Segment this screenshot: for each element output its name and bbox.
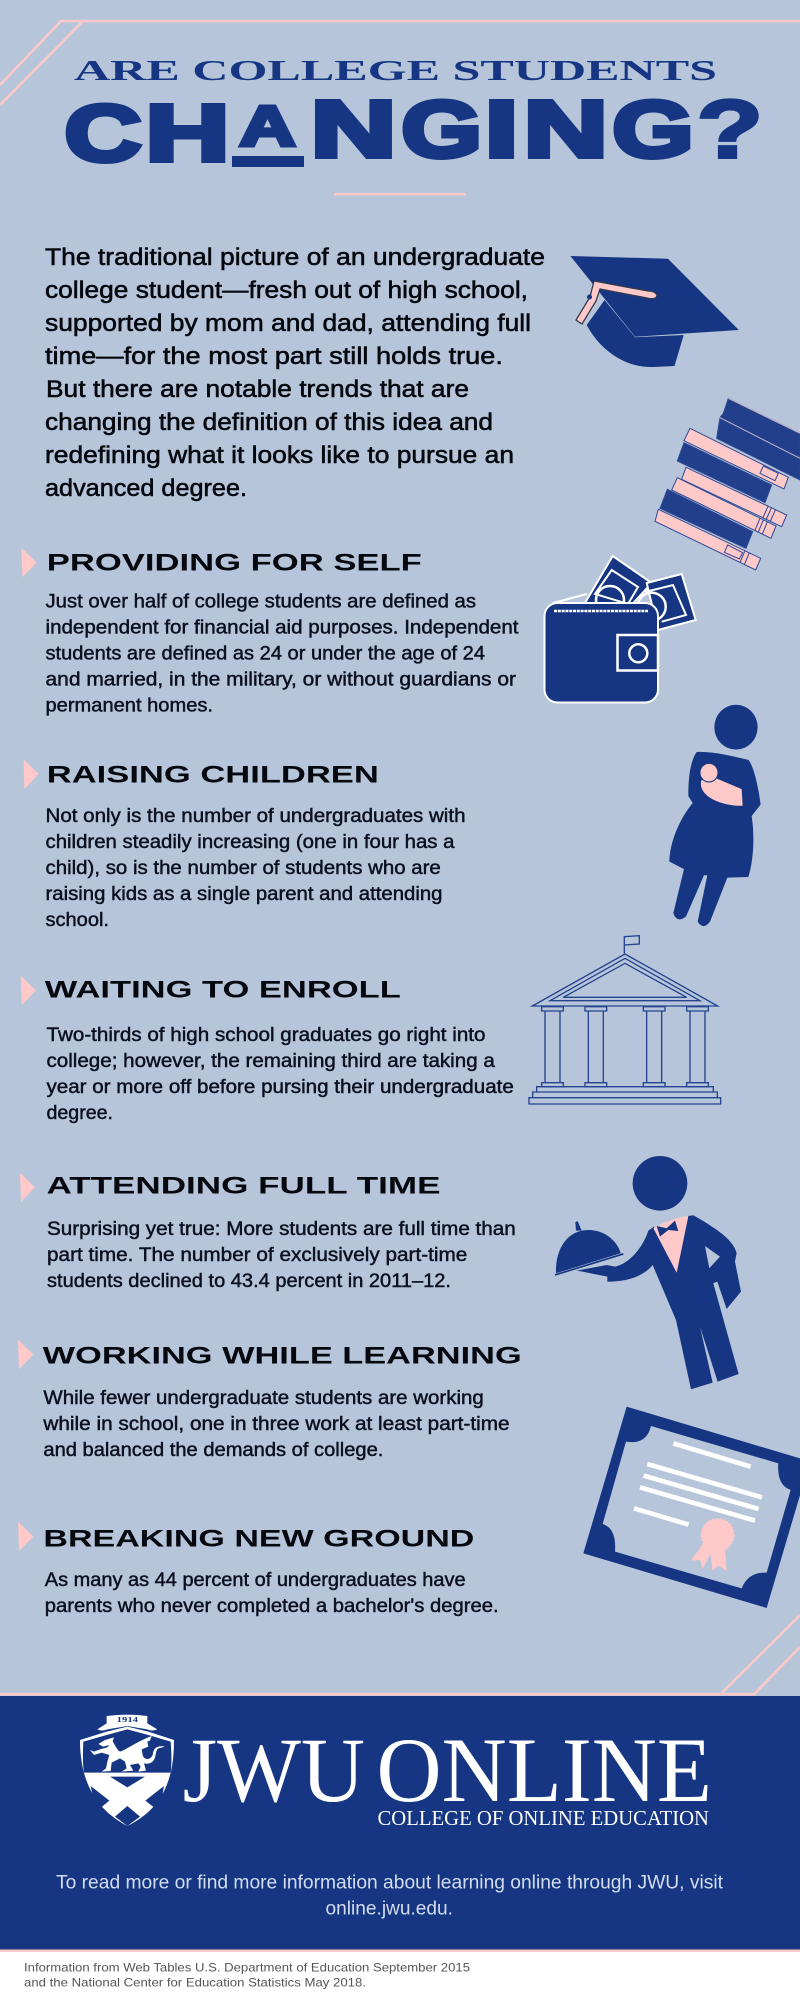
- body text: raising kids as a single parent and attending: [46, 884, 442, 905]
- heading: RAISING CHILDREN: [47, 762, 379, 789]
- title line: changing: H: [146, 88, 230, 178]
- call to action text: [56, 1872, 724, 1919]
- heading: ATTENDING FULL TIME: [46, 1172, 440, 1199]
- icon: stack of books: [655, 398, 800, 570]
- body text: [46, 806, 466, 931]
- body text: Two-thirds of high school graduates go right into: [46, 1025, 486, 1046]
- body text: students declined to 43.4 percent in 2011–12.: [47, 1271, 451, 1292]
- title line: changing: N: [311, 84, 396, 174]
- intro paragraph: But there are notable trends that are: [46, 376, 469, 403]
- title line: are college students: ARE COLLEGE STUDENTS: [74, 56, 717, 87]
- arrow: [21, 548, 37, 577]
- title line: changing: N: [524, 84, 608, 174]
- body text: year or more off before pursing their undergraduate: [46, 1077, 514, 1098]
- body text: [45, 1570, 499, 1617]
- body text: As many as 44 percent of undergraduates have: [45, 1570, 466, 1591]
- title line: changing: I: [485, 84, 518, 174]
- icon: graduation cap: [570, 256, 739, 367]
- body text: college; however, the remaining third are taking a: [46, 1051, 495, 1072]
- title line: changing: G: [612, 84, 694, 174]
- title line: changing: G: [402, 84, 482, 174]
- call to action text: To read more or find more information about learning online through JWU, visit: [56, 1872, 724, 1893]
- body text: While fewer undergraduate students are working: [43, 1388, 484, 1409]
- arrow: [23, 759, 39, 789]
- body text: child), so is the number of students who are: [46, 858, 441, 879]
- section: providing for self: [21, 548, 519, 716]
- body text: independent for financial aid purposes. Independent: [46, 617, 519, 638]
- icon: mother holding child: [669, 705, 761, 926]
- section: waiting to enroll: [21, 976, 514, 1124]
- body text: [46, 1025, 514, 1124]
- intro paragraph: supported by mom and dad, attending full: [45, 310, 531, 337]
- intro paragraph: advanced degree.: [45, 475, 247, 502]
- intro paragraph: changing the definition of this idea and: [45, 409, 493, 436]
- body text: [46, 591, 519, 716]
- intro paragraph: The traditional picture of an undergraduate: [45, 244, 545, 271]
- intro paragraph: time—for the most part still holds true.: [45, 343, 503, 370]
- body text: degree.: [46, 1103, 113, 1124]
- body text: Not only is the number of undergraduates with: [46, 806, 466, 827]
- source note: Information from Web Tables U.S. Department of Education September 2015: [24, 1961, 470, 1975]
- logo: crest: 1914: [117, 1715, 138, 1724]
- arrow: [18, 1522, 33, 1551]
- call to action text: online.jwu.edu.: [326, 1898, 453, 1919]
- section: raising children: [23, 759, 466, 931]
- title line: changing: [65, 82, 763, 178]
- logo: wordmark: [183, 1719, 712, 1830]
- heading: WORKING WHILE LEARNING: [43, 1342, 522, 1369]
- arrow: [20, 1173, 35, 1202]
- intro paragraph: redefining what it looks like to pursue an: [45, 442, 514, 469]
- logo: wordmark: COLLEGE OF ONLINE EDUCATION: [378, 1806, 709, 1830]
- heading: WAITING TO ENROLL: [45, 977, 401, 1004]
- body text: and balanced the demands of college.: [43, 1440, 383, 1461]
- body text: [47, 1219, 516, 1292]
- section: breaking new ground: [18, 1522, 499, 1617]
- title line: changing: C: [65, 88, 141, 178]
- title line: changing: A: [240, 96, 296, 158]
- body text: and married, in the military, or without guardians or: [46, 669, 517, 690]
- body text: [42, 1388, 510, 1461]
- title line: changing: ?: [697, 82, 763, 176]
- panel: footer band: [0, 1696, 800, 1952]
- heading: PROVIDING FOR SELF: [47, 550, 422, 576]
- intro paragraph: college student—fresh out of high school,: [45, 277, 528, 304]
- body text: children steadily increasing (one in four has a: [46, 832, 455, 853]
- body text: parents who never completed a bachelor's degree.: [45, 1596, 499, 1617]
- body text: students are defined as 24 or under the age of 24: [46, 643, 485, 664]
- icon: college building: [529, 936, 721, 1104]
- logo: wordmark: JWU: [183, 1719, 365, 1821]
- source note: [24, 1961, 470, 1990]
- body text: part time. The number of exclusively part-time: [47, 1245, 467, 1266]
- icon: waiter with cloche: [555, 1156, 741, 1389]
- icon: diploma: [583, 1407, 800, 1608]
- body text: permanent homes.: [46, 695, 213, 716]
- arrow: [18, 1340, 33, 1369]
- icon: wallet with money: [544, 556, 696, 702]
- logo: crest: [80, 1715, 174, 1826]
- section: attending full time: [20, 1172, 516, 1292]
- body text: Surprising yet true: More students are full time than: [47, 1219, 516, 1240]
- title: [65, 56, 763, 178]
- heading: BREAKING NEW GROUND: [43, 1526, 474, 1553]
- intro paragraph: [45, 244, 545, 502]
- body text: Just over half of college students are defined as: [46, 591, 476, 612]
- arrow: [21, 976, 36, 1005]
- source note: and the National Center for Education Statistics May 2018.: [24, 1976, 366, 1990]
- logo: wordmark: ONLINE: [376, 1719, 712, 1821]
- body text: school.: [46, 910, 109, 931]
- body text: while in school, one in three work at least part-time: [42, 1414, 510, 1435]
- section: working while learning: [18, 1340, 522, 1461]
